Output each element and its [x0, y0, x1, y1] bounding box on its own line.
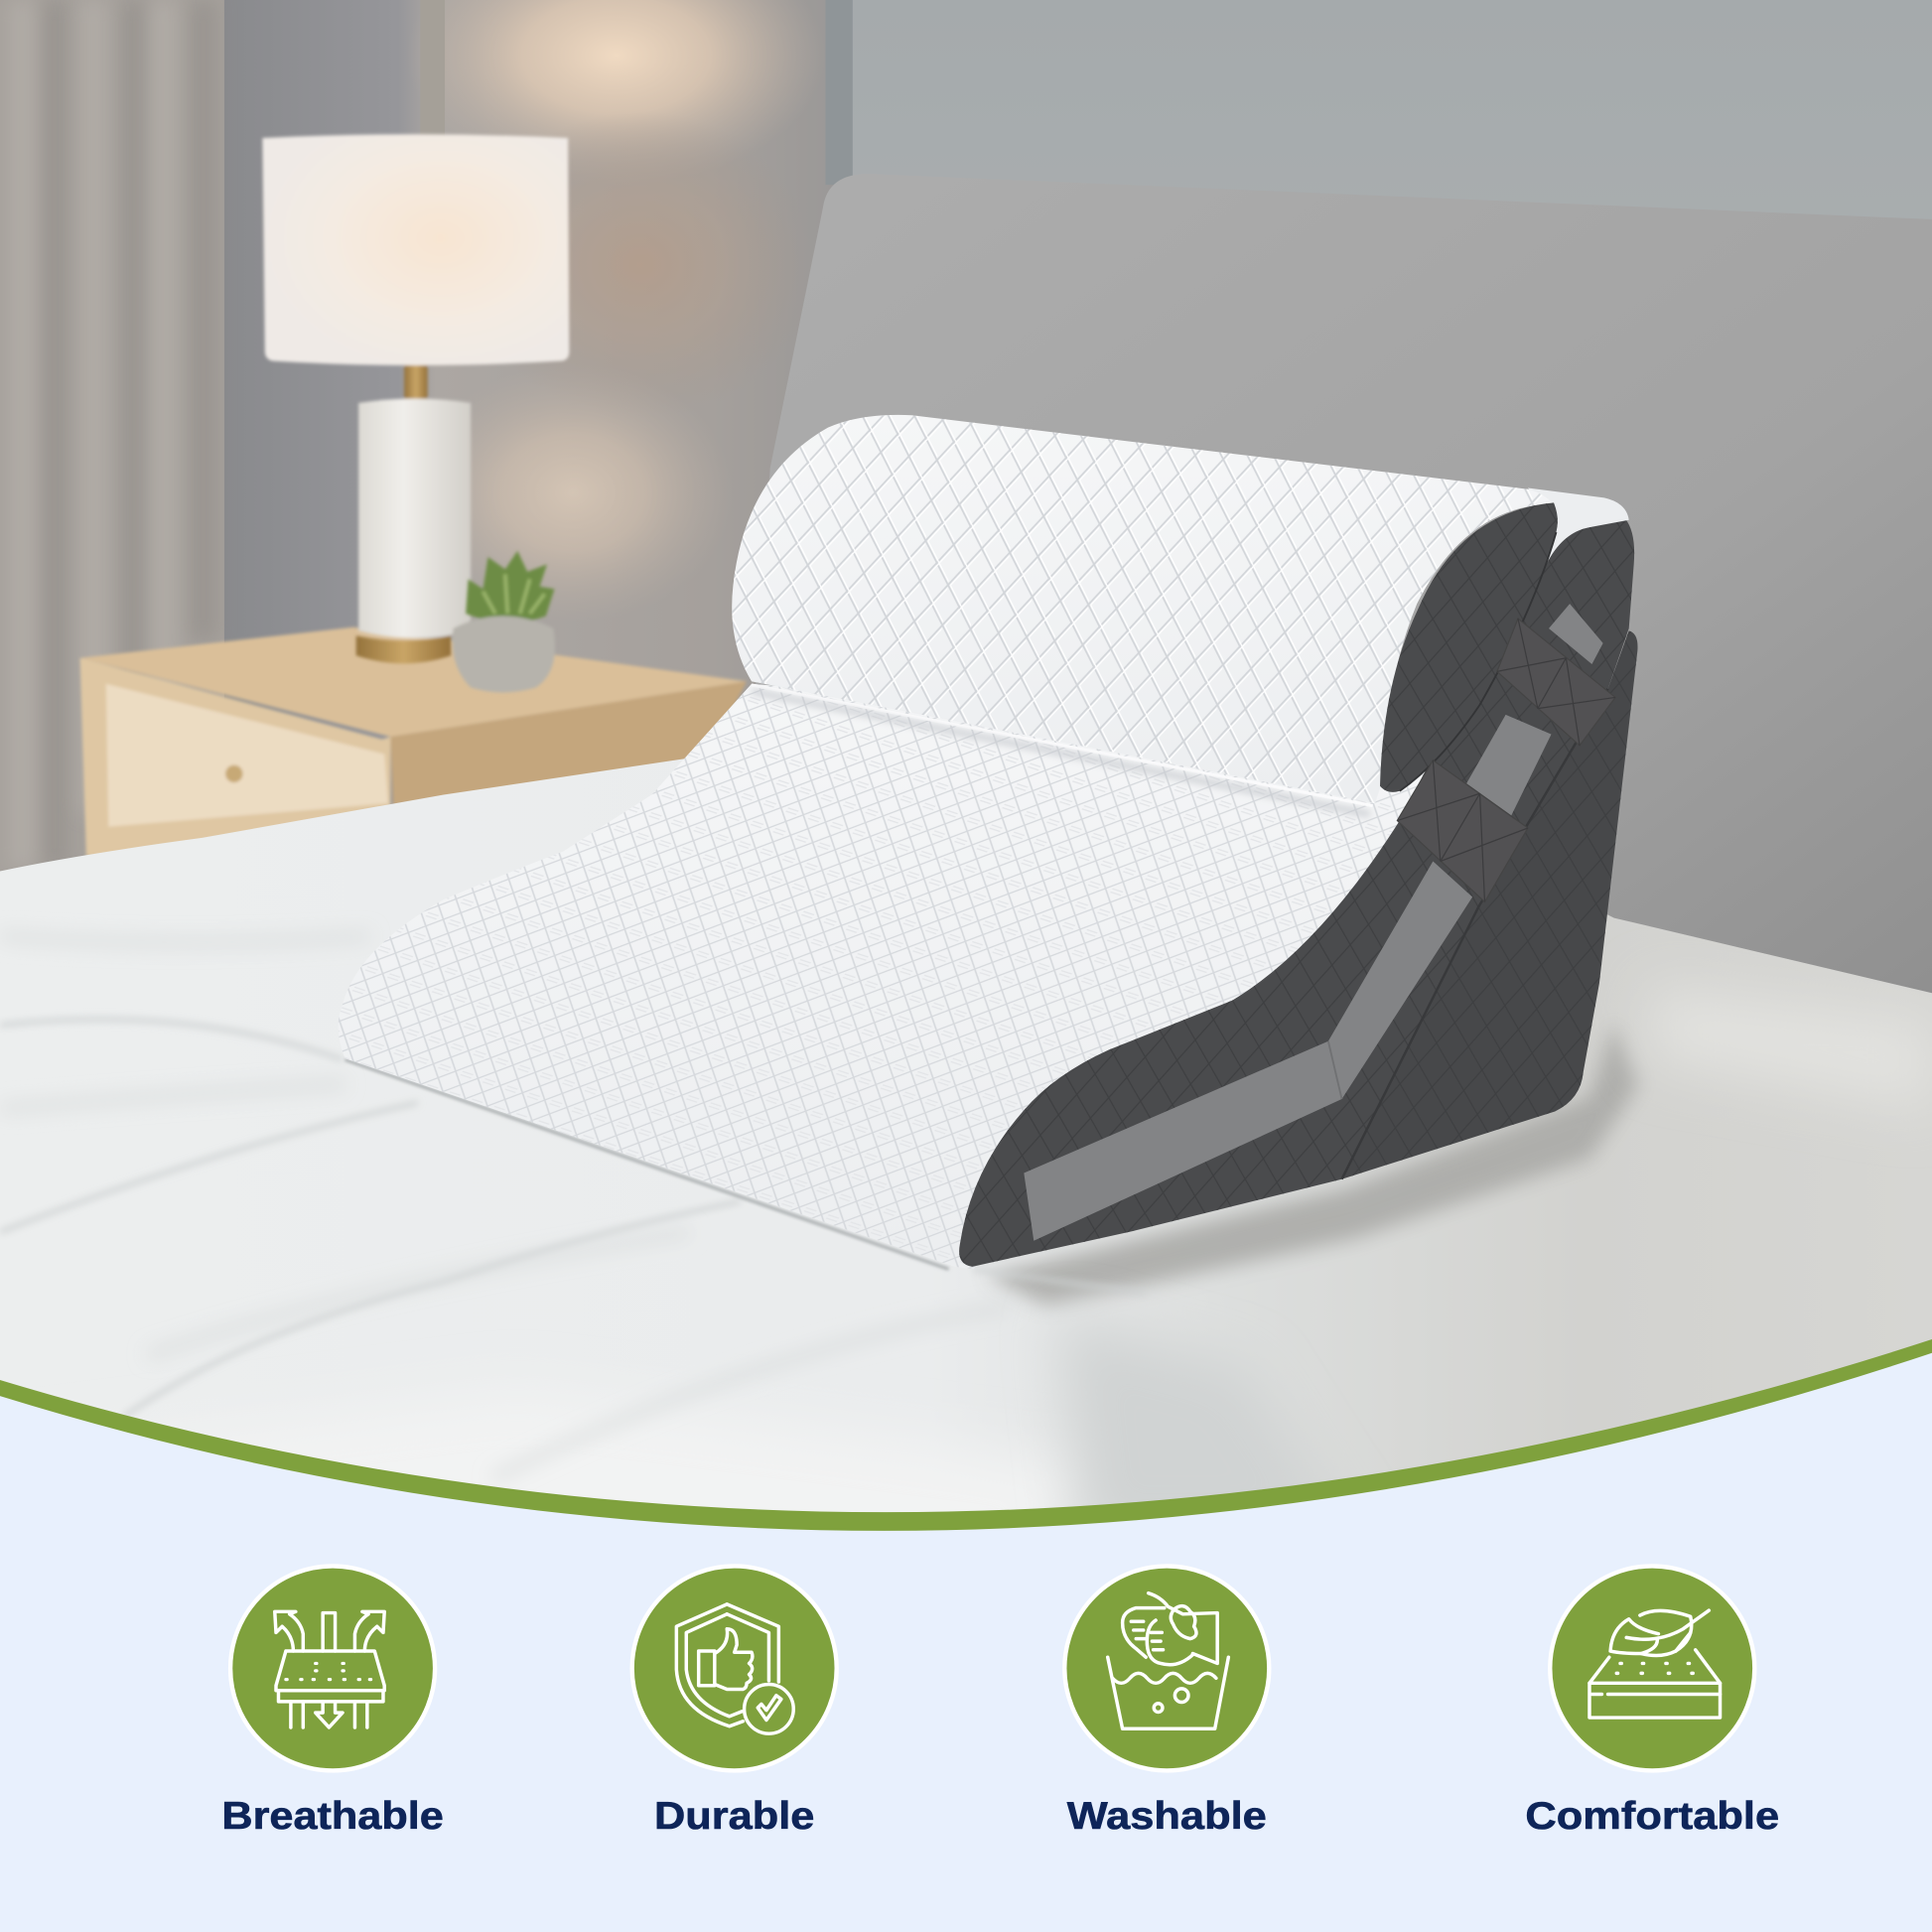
upper strap loop [1497, 619, 1615, 746]
icon: comfortable mattress badge [1550, 1566, 1754, 1770]
label: Washable: Washable [1067, 1795, 1267, 1838]
label: Durable: Durable [654, 1795, 814, 1838]
bedroom photo background [0, 0, 1932, 1512]
bolster dark end face [1380, 502, 1558, 792]
icon: durable shield badge [632, 1566, 837, 1770]
shading on the sheet [986, 1023, 1639, 1307]
product: wedge pillow set [339, 415, 1638, 1269]
bed and bedding [0, 759, 1932, 1512]
window frame post [826, 0, 853, 185]
nightstand [80, 627, 747, 857]
feature: Durable [632, 1566, 837, 1838]
wall post behind lamp [420, 0, 445, 138]
lower strap loop [1397, 760, 1528, 901]
green curved divider [0, 1339, 1932, 1532]
potted succulent [453, 551, 555, 692]
right wall [838, 0, 1932, 1011]
rear wedge dark side [1342, 630, 1638, 1179]
icon: breathable green badge [230, 1566, 435, 1770]
label: Comfortable: Comfortable [1525, 1795, 1779, 1838]
label: Breathable: Breathable [221, 1795, 444, 1838]
pale blue panel [0, 1353, 1932, 1932]
left wall [209, 0, 838, 888]
middle section dark side [959, 518, 1634, 1267]
lamp glow on wall [407, 0, 826, 622]
headboard [752, 174, 1932, 1023]
rear bolster white top [1528, 487, 1629, 564]
curtain [0, 0, 224, 875]
upper bolster white quilted surface [732, 415, 1554, 814]
feature: Comfortable [1525, 1566, 1779, 1838]
bottom feature panel [0, 1339, 1932, 1932]
table lamp [262, 134, 569, 663]
icon: washable tub badge [1064, 1566, 1269, 1770]
light gray strap [1024, 604, 1603, 1241]
drawer knob [225, 765, 242, 782]
lower wedge white quilted surface [339, 684, 1442, 1269]
feature: Breathable [221, 1566, 444, 1838]
feature: Washable [1064, 1566, 1269, 1838]
